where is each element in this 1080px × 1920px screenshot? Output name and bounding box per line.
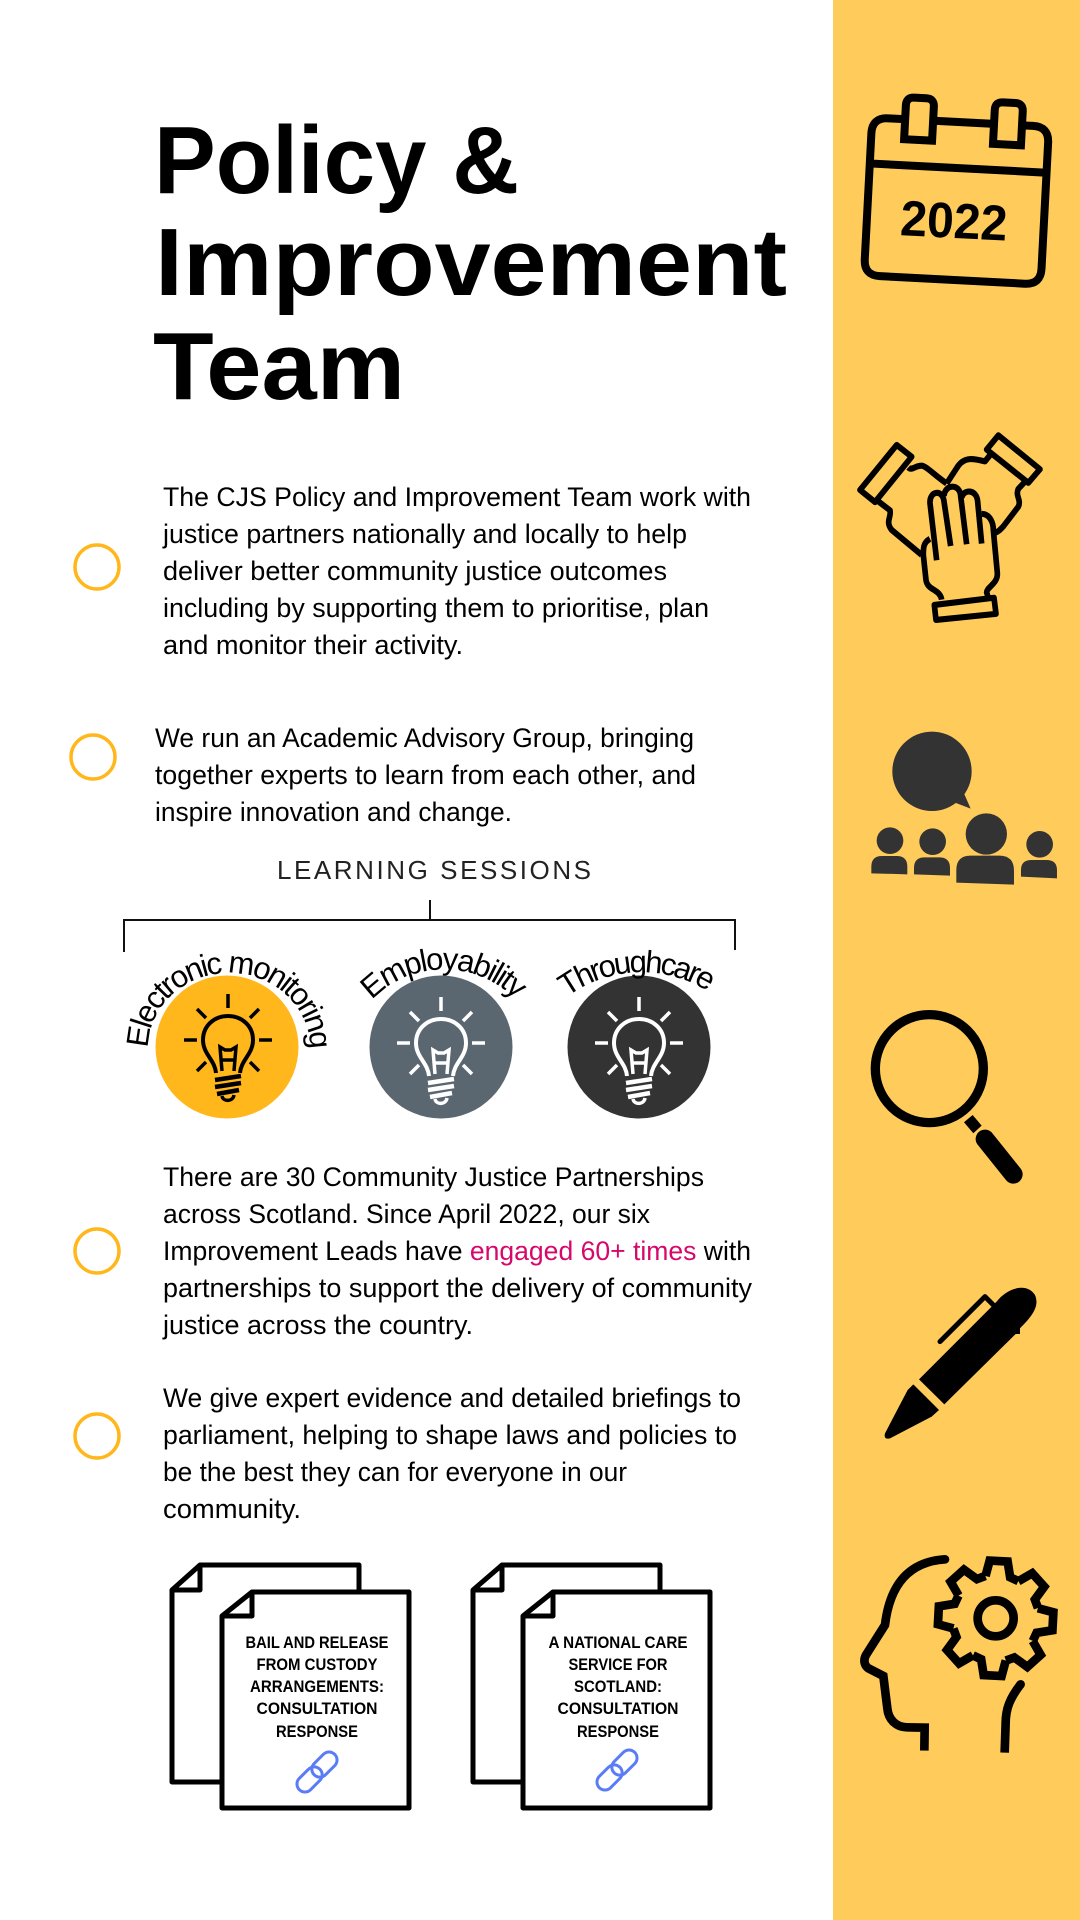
document: bail and release: FROM CUSTODY: [256, 1656, 378, 1674]
session: employability: Employability: [360, 948, 527, 998]
icon: link: [594, 1747, 640, 1793]
text block: team intro: justice partners nationally and locally to help: [162, 519, 687, 549]
icon: joined hands: [860, 435, 1040, 620]
bullet marker 3: [75, 1229, 119, 1273]
session: electronic monitoring: [126, 954, 327, 1118]
icon: light bulb white on dark: [595, 997, 683, 1103]
text block: community justice partnerships: There are 30 Community Justice Partnerships: [163, 1162, 704, 1192]
text block: team intro: deliver better community justice outcomes: [163, 556, 667, 586]
text block: community justice partnerships: partnerships to support the delivery of community: [163, 1273, 752, 1303]
text block: community justice partnerships: across Scotland. Since April 2022, our six: [163, 1199, 650, 1229]
icon: link: [294, 1749, 340, 1795]
session: throughcare: Throughcare: [556, 950, 712, 992]
text block: parliament evidence: parliament, helping to shape laws and policies to: [163, 1420, 737, 1450]
icon: calendar 2022: 2022: [899, 190, 1009, 252]
document: national care service: [473, 1565, 710, 1808]
icon: magnifying glass: [875, 1015, 1013, 1174]
document: bail and release: CONSULTATION: [256, 1700, 378, 1718]
bullet marker 1: [75, 545, 119, 589]
text block: parliament evidence: [163, 1383, 741, 1524]
text block: academic advisory group: [155, 723, 696, 827]
bracket connector: [124, 900, 735, 952]
bullet marker 2: [71, 735, 115, 779]
icon: speech bubble and audience: [871, 732, 1057, 885]
text block: parliament evidence: be the best they can for everyone in our: [163, 1457, 627, 1487]
text block: parliament evidence: We give expert evidence and detailed briefings to: [163, 1383, 741, 1413]
text block: community justice partnerships: [162, 1162, 752, 1340]
session: throughcare: [556, 950, 712, 1118]
document: national care service: SERVICE FOR: [568, 1656, 668, 1674]
text block: team intro: including by supporting them to prioritise, plan: [163, 593, 709, 623]
session: employability: [360, 948, 527, 1118]
document: national care service: RESPONSE: [577, 1723, 659, 1741]
text block: team intro: The CJS Policy and Improvement Team work with: [163, 482, 751, 512]
text block: community justice partnerships: Improvement Leads have engaged 60+ times with: [163, 1236, 751, 1266]
icon: light bulb black: [184, 994, 272, 1100]
text block: academic advisory group: inspire innovation and change.: [155, 797, 512, 827]
panel: yellow icon column: [833, 0, 1080, 1920]
document: bail and release: BAIL AND RELEASE: [246, 1634, 388, 1652]
title: Team: [153, 313, 405, 420]
text block: academic advisory group: We run an Academic Advisory Group, bringing: [155, 723, 694, 753]
text block: parliament evidence: community.: [163, 1494, 301, 1524]
title: Improvement: [155, 209, 787, 316]
title: Policy &: [154, 107, 519, 214]
text block: community justice partnerships: justice across the country.: [162, 1310, 473, 1340]
heading: learning sessions: LEARNING SESSIONS: [277, 855, 591, 885]
icon: light bulb white: [397, 997, 485, 1103]
session: electronic monitoring: Electronic monitoring: [126, 954, 327, 1048]
document: national care service: CONSULTATION: [558, 1700, 678, 1718]
icon: calendar 2022: [864, 96, 1050, 285]
document: bail and release: [172, 1565, 409, 1808]
text block: team intro: [162, 482, 751, 660]
icon: head with gear: [864, 1555, 1056, 1753]
icon: pen: [885, 1288, 1036, 1439]
document: national care service: SCOTLAND:: [574, 1678, 662, 1696]
text block: team intro: and monitor their activity.: [163, 630, 463, 660]
bullet marker 4: [75, 1414, 119, 1458]
document: bail and release: RESPONSE: [276, 1723, 358, 1741]
document: bail and release: ARRANGEMENTS:: [250, 1678, 384, 1696]
text block: academic advisory group: together experts to learn from each other, and: [155, 760, 696, 790]
title: [153, 107, 787, 420]
document: national care service: A NATIONAL CARE: [548, 1634, 688, 1652]
